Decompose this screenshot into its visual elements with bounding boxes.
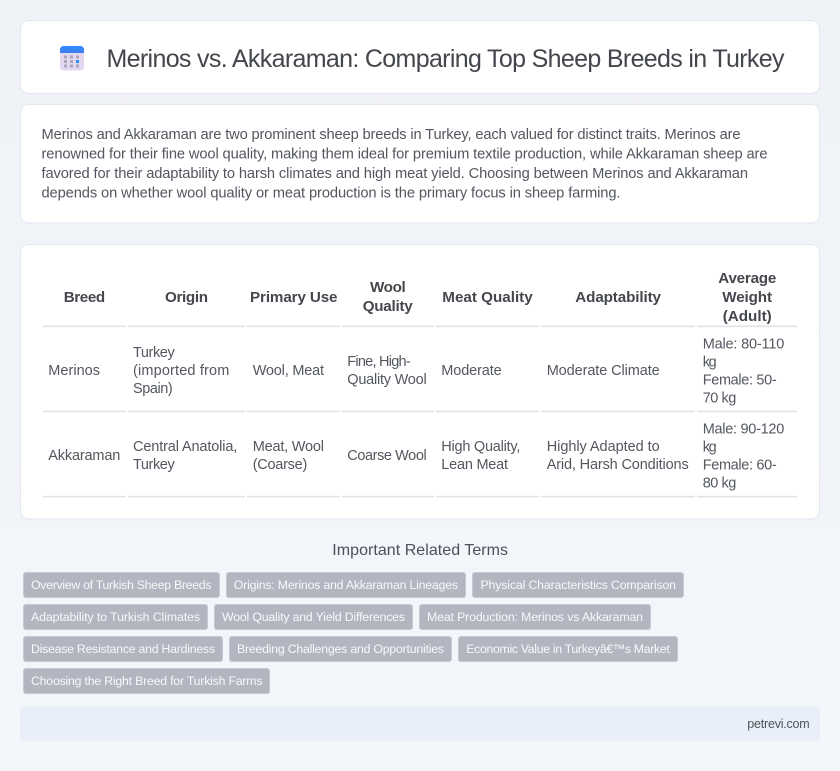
table row: Merinos: Merinos [48,363,100,379]
table header row: Breed [64,289,105,306]
table row: Akkaraman: 80 kg [703,476,736,492]
tag: Physical Characteristics Comparison [472,572,684,598]
tag: Choosing the Right Breed: Choosing the Right Breed for Turkish Farms [31,674,262,688]
tag: Meat Production [420,604,650,630]
panel: comparison table [20,244,820,519]
tag: Physical Characteristics Comparison: Physical Characteristics Comparison [480,578,676,592]
tag: Economic Value: Economic Value in Turkeyâ€™s Market [466,642,670,656]
table row: Merinos: Spain) [133,381,173,397]
table row: Akkaraman [48,422,784,492]
table row: Merinos: (imported from [133,363,229,379]
table row: Merinos: 70 kg [703,390,736,406]
table row: Akkaraman: Arid, Harsh Conditions [547,457,689,473]
table row: Akkaraman: Meat, Wool [253,439,324,455]
table row: Akkaraman: Highly Adapted to [547,439,660,455]
table row: Akkaraman: High Quality, [441,439,520,455]
panel: introduction [20,104,820,223]
icon: calendar [60,46,84,70]
table header row: Wool [370,279,406,296]
table row: Akkaraman: kg [703,440,717,456]
table row: Merinos: Wool, Meat [253,363,324,379]
table header row: Quality [363,298,413,315]
table header row: (Adult) [723,308,772,325]
tag: Choosing the Right Breed [24,668,270,694]
tag: Origins: Origins: Merinos and Akkaraman Lineages [234,578,458,592]
tag: Overview of Turkish Sheep Breeds: Overview of Turkish Sheep Breeds [31,578,212,592]
table row: Akkaraman: Lean Meat [441,457,508,473]
table header row: Average [718,270,776,287]
table row: Akkaraman: Central Anatolia, [133,439,237,455]
panel: title header [20,20,820,94]
table row: Akkaraman: Female: 60- [703,458,777,474]
table row: Merinos: Turkey [133,345,175,361]
table row: Akkaraman: (Coarse) [253,457,307,473]
table row: Merinos: Fine, High- [347,354,411,370]
table header row: Adaptability [575,289,662,306]
tag: Breeding Challenges and Opportunities: Breeding Challenges and Opportunities [237,642,444,656]
tag: Wool Quality and Yield Differences [214,604,412,630]
tag: Wool Quality and Yield Differences: Wool Quality and Yield Differences [222,610,405,624]
table row: Akkaraman: Turkey [133,457,175,473]
tag: Meat Production: Meat Production: Merinos vs Akkaraman [427,610,643,624]
table row: Merinos: kg [703,354,717,370]
tag: Adaptability to Turkish Climates: Adaptability to Turkish Climates [31,610,200,624]
text block: introduction paragraph: favored for their adaptability to harsh climates and high meat yield. Choosing between Merinos and Akkaraman [42,166,748,182]
footer text: source site: petrevi.com [747,717,810,731]
tag: Origins [226,572,466,598]
heading: important related terms: Important Related Terms [332,542,508,559]
table row: Akkaraman: Male: 90-120 [703,422,784,438]
footer [20,707,820,741]
text block: introduction paragraph: Merinos and Akkaraman are two prominent sheep breeds in Turkey, each valued for distinct traits. Merinos are [42,127,740,143]
table row: Akkaraman: Akkaraman [48,448,120,464]
tag: Disease Resistance and Hardiness [24,636,222,662]
table header row: Meat Quality [442,289,533,306]
table row: Merinos: Quality Wool [347,372,427,388]
text block: introduction paragraph: renowned for their fine wool quality, making them ideal for premium textile production, while Akkaraman sheep are [42,146,768,162]
tag: Economic Value [458,636,678,662]
table row: Merinos: Moderate [441,363,502,379]
table header row: Weight [722,289,772,306]
tag: Disease Resistance and Hardiness: Disease Resistance and Hardiness [31,642,215,656]
tag: Breeding Challenges and Opportunities [230,636,452,662]
table header row: Origin [165,289,208,306]
title: Merinos vs. Akkaraman: Comparing Top Sheep Breeds in Turkey [106,45,785,73]
tag: Overview of Turkish Sheep Breeds [24,572,220,598]
table row: Merinos [48,336,784,406]
text block: introduction paragraph: depends on whether wool quality or meat production is the primary focus in sheep farming. [42,186,620,202]
table header row [64,270,776,325]
table row: Merinos: Male: 80-110 [703,336,784,352]
tag: Adaptability to Turkish Climates [24,604,208,630]
table row: Merinos: Moderate Climate [547,363,660,379]
table header row: Primary Use [250,289,338,306]
table row: Merinos: Female: 50- [703,372,777,388]
panel: related term tags [24,572,684,694]
table row: Akkaraman: Coarse Wool [347,448,427,464]
text block: introduction paragraph [42,127,768,202]
